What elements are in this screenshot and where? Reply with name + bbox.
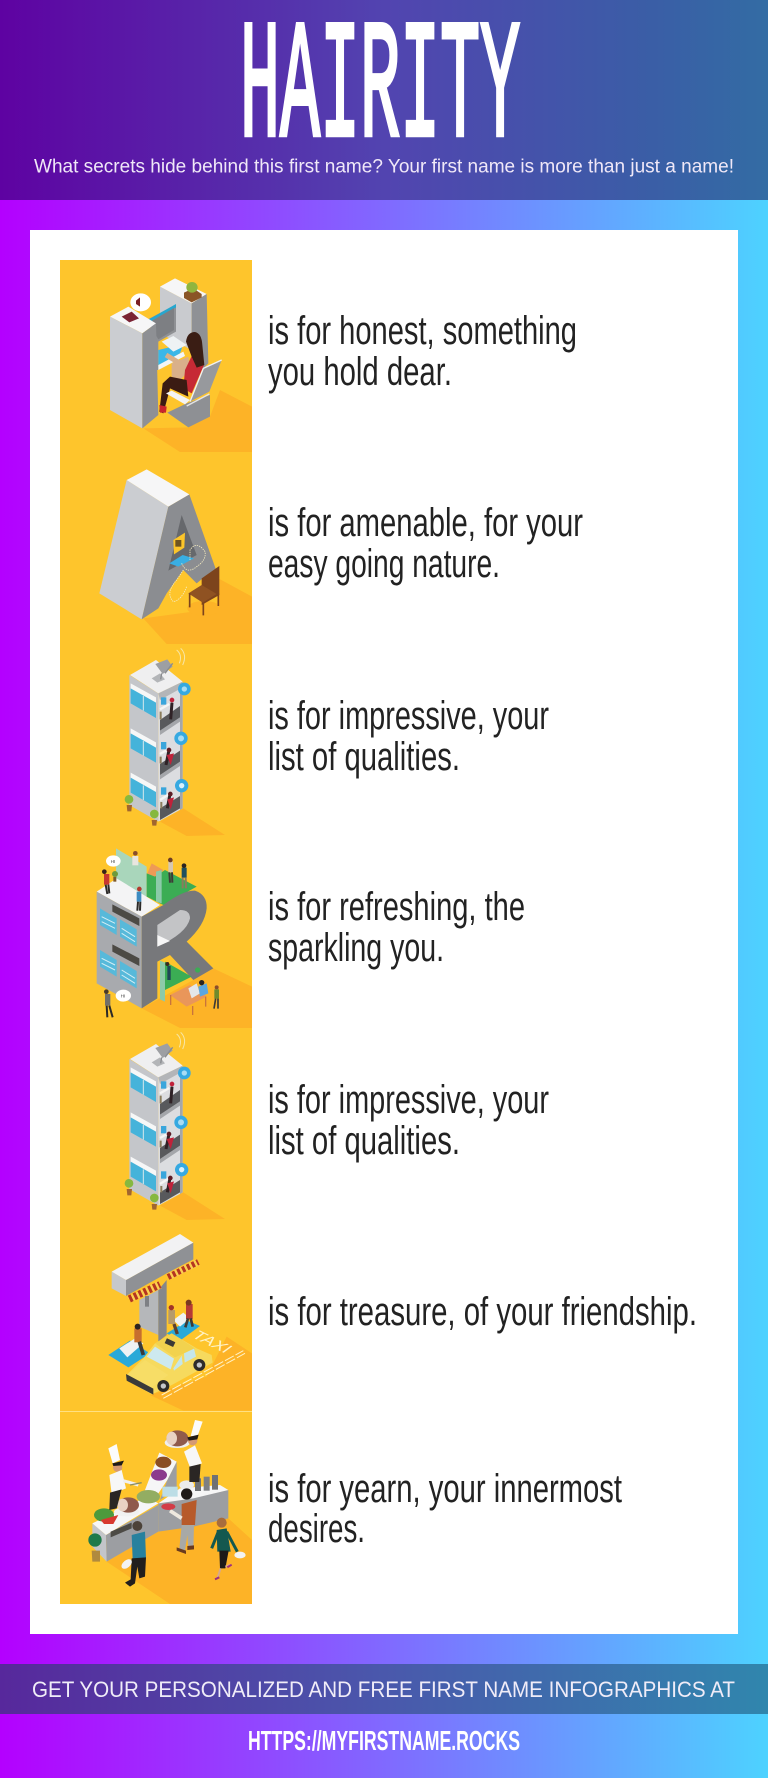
topiary plant: [88, 1533, 102, 1547]
illustration: letter R building with people: HI: [111, 859, 115, 864]
panel: yellow illustration column: [60, 260, 252, 1604]
illustration: letter H with woman at computer: [110, 278, 252, 452]
illustration: letter Y buffet counter with chefs: [88, 1420, 252, 1604]
text block: Y: desires.: [268, 1507, 365, 1551]
illustration: letter I building with balconies (repeat): [125, 1032, 225, 1220]
text block: A: easy going nature.: [268, 542, 500, 586]
text block: I: list of qualities.: [268, 735, 460, 779]
illustration: letter I building with balconies: [125, 648, 225, 836]
illustration: letter R building with people: [97, 848, 252, 1028]
illustration: letter T with taxi: [112, 1234, 252, 1411]
label: HI bubble: [106, 855, 121, 867]
footer call-to-action band: [0, 1664, 768, 1714]
taxi body: [127, 1333, 213, 1394]
text block: A: is for amenable, for your: [268, 501, 583, 545]
footer call-to-action band: GET YOUR PERSONALIZED AND FREE FIRST NAME INFOGRAPHICS AT: [32, 1677, 735, 1702]
text block: I: is for impressive, your: [268, 694, 549, 738]
diner orange: [181, 1488, 192, 1500]
diner blue: [132, 1521, 142, 1531]
text block: I second: [268, 1078, 549, 1163]
text block: I second: is for impressive, your: [268, 1078, 549, 1122]
tile divider hairline: [60, 1411, 252, 1412]
header band: [0, 0, 768, 200]
subtitle: What secrets hide behind this first name? Your first name is more than just a name!: [34, 156, 734, 178]
text block: Y: [268, 1467, 622, 1551]
text block: H: is for honest, something: [268, 309, 577, 353]
text block: H: [268, 309, 577, 394]
diner teal: [217, 1518, 227, 1528]
text block: I second: list of qualities.: [268, 1119, 460, 1163]
text block: R: is for refreshing, the: [268, 885, 525, 929]
text block: Y: is for yearn, your innermost: [268, 1467, 622, 1511]
text block: I: [268, 694, 549, 779]
illustration: letter R building with people: HI: [121, 994, 125, 999]
footer url: HTTPS://MYFIRSTNAME.ROCKS: [248, 1725, 520, 1756]
illustration: letter A with chair: [99, 469, 252, 644]
text block: R: sparkling you.: [268, 926, 444, 970]
foods: [94, 1508, 114, 1522]
text block: A: [268, 501, 583, 586]
text block: R: [268, 885, 525, 970]
text block: H: you hold dear.: [268, 350, 452, 394]
label: TAXI road text: TAXI: [187, 1329, 236, 1356]
title: HAIRITY: [240, 0, 520, 186]
chef 1: [108, 1444, 120, 1463]
panel: white content card: [30, 230, 738, 1634]
illustration: taxi scene: [108, 1300, 245, 1398]
chef 2: [165, 1437, 190, 1448]
